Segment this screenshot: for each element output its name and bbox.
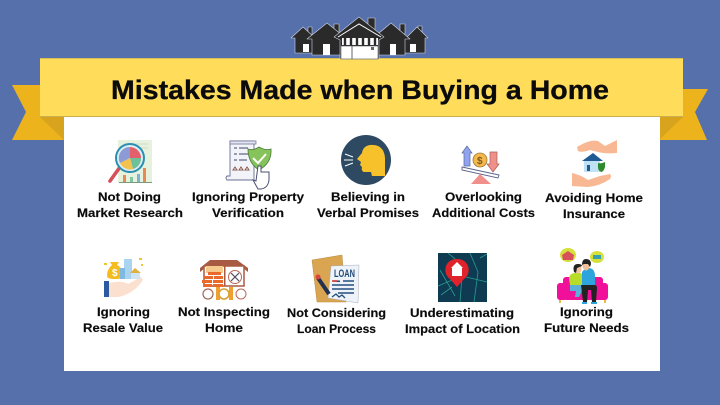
label: ignoring future needs: Future Needs [544,321,629,335]
icon: market research [110,140,152,183]
label: overlooking additional costs [432,190,535,220]
label: avoiding home insurance: Avoiding Home [545,191,643,205]
label: ignoring property verification: Ignoring Property [192,190,304,204]
label: not considering loan process: Loan Process [297,322,376,336]
label: avoiding home insurance: Insurance [563,207,625,221]
label: not considering loan process [287,306,386,336]
icon: inspecting home [200,260,248,300]
label: overlooking additional costs: Additional Costs [432,206,535,220]
icon: couple on sofa [557,248,608,304]
label: not considering loan process: Not Considering [287,306,386,320]
title banner [40,58,683,117]
label: not doing market research: Market Research [77,206,183,220]
label: ignoring future needs: Ignoring [560,305,613,319]
icon: row of houses [291,17,428,59]
label: ignoring resale value: Resale Value [83,321,163,335]
icon: loan documents: LOAN [334,268,355,280]
panel: white content area [64,117,660,371]
icon: additional costs scale: $ [477,156,483,167]
label: underestimating impact of location [405,306,520,336]
label: ignoring property verification [192,190,304,220]
label: believing in verbal promises [317,190,419,220]
label: believing in verbal promises: Believing in [331,190,405,204]
icon: resale value [104,259,143,297]
icon: location map pin [438,253,487,302]
label: believing in verbal promises: Verbal Promises [317,206,419,220]
label: ignoring resale value: Ignoring [97,305,150,319]
label: ignoring property verification: Verification [212,206,284,220]
icon: property verification [226,141,271,189]
label: not doing market research: Not Doing [98,190,161,204]
icon: resale value: $ [112,268,118,279]
label: ignoring resale value [83,305,163,335]
icon: loan documents [312,255,359,303]
title: Mistakes Made when Buying a Home [111,75,609,105]
label: underestimating impact of location: Underestimating [410,306,514,320]
label: not inspecting home [178,305,270,335]
label: not doing market research [77,190,183,220]
label: ignoring future needs [544,305,629,335]
label: not inspecting home: Not Inspecting [178,305,270,319]
icon: additional costs scale [462,146,499,184]
icon: home insurance [572,140,617,187]
label: underestimating impact of location: Impact of Location [405,322,520,336]
label: not inspecting home: Home [205,321,243,335]
label: overlooking additional costs: Overlooking [445,190,522,204]
right ribbon tail [659,89,708,140]
left ribbon tail [12,85,64,140]
label: avoiding home insurance [545,191,643,221]
icon: verbal promises [341,135,391,185]
